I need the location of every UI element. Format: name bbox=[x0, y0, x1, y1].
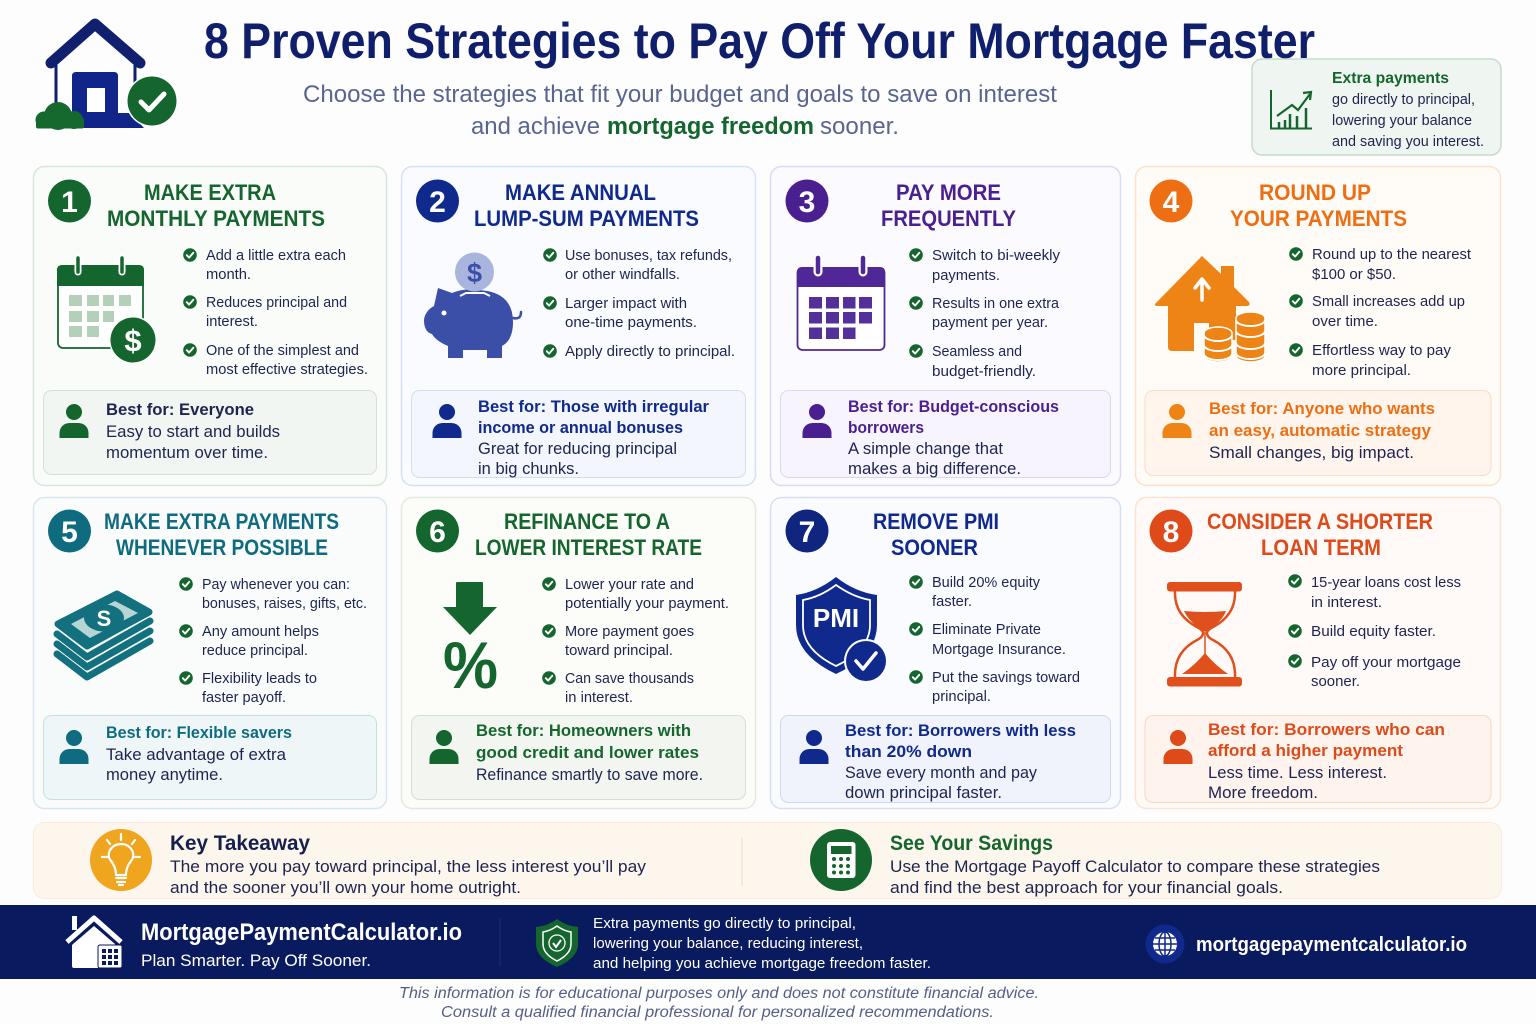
bullet list 6: Lower your rate and bbox=[565, 577, 694, 593]
best for 2: income or annual bonuses bbox=[478, 418, 683, 437]
bullet list 3: payment per year. bbox=[932, 315, 1048, 331]
bullet list 6: More payment goes bbox=[565, 624, 694, 640]
website url: mortgagepaymentcalculator.io bbox=[1196, 934, 1467, 956]
bullet list 3: Seamless and bbox=[932, 344, 1022, 360]
callout: extra payments: lowering your balance bbox=[1332, 113, 1472, 129]
panel: strategy 2 bbox=[402, 166, 756, 486]
heading 8: LOAN TERM bbox=[1261, 535, 1381, 560]
icon: house with coins bbox=[1155, 256, 1265, 362]
best for 7: Save every month and pay bbox=[845, 764, 1038, 782]
heading 6: REFINANCE TO A bbox=[504, 509, 670, 534]
number badge 4 bbox=[1150, 180, 1192, 222]
footer brand: Plan Smarter. Pay Off Sooner. bbox=[141, 951, 371, 970]
best for 5 bbox=[44, 716, 376, 800]
title: 8 Proven Strategies to Pay Off Your Mortgage Faster bbox=[204, 13, 1315, 69]
best for 4: Small changes, big impact. bbox=[1209, 444, 1414, 462]
subtitle: mortgage freedom bbox=[607, 113, 814, 140]
panel: strategy 4 bbox=[1136, 166, 1500, 486]
best for 7: down principal faster. bbox=[845, 784, 1002, 802]
number badge 5: 5 bbox=[61, 516, 78, 549]
number badge 5 bbox=[48, 510, 91, 552]
number badge 3: 3 bbox=[799, 186, 815, 219]
icon: calendar with dollar bbox=[57, 258, 157, 364]
best for 5: Best for: Flexible savers bbox=[106, 723, 292, 742]
bullet list 5 bbox=[179, 577, 367, 706]
icon: down arrow and percent bbox=[443, 582, 498, 702]
best for 6: good credit and lower rates bbox=[476, 743, 699, 762]
icon: stack of cash bbox=[57, 594, 150, 677]
best for 7: than 20% down bbox=[845, 742, 972, 761]
heading 3: FREQUENTLY bbox=[881, 206, 1016, 231]
bullet list 6: in interest. bbox=[565, 690, 633, 706]
takeaway band bbox=[34, 822, 1502, 898]
number badge 8 bbox=[1150, 510, 1192, 552]
heading 8: CONSIDER A SHORTER bbox=[1207, 509, 1433, 534]
bullet list 3: budget-friendly. bbox=[932, 364, 1036, 380]
heading 5: WHENEVER POSSIBLE bbox=[116, 535, 328, 560]
heading 2: LUMP-SUM PAYMENTS bbox=[474, 206, 699, 231]
best for 2: in big chunks. bbox=[478, 460, 579, 478]
bullet list 8: in interest. bbox=[1311, 595, 1382, 611]
disclaimer: Consult a qualified financial professional for personalized recommendations. bbox=[441, 1004, 994, 1021]
footer brand: MortgagePaymentCalculator.io bbox=[141, 919, 462, 946]
bullet list 7: principal. bbox=[932, 689, 991, 705]
bullet list 1: most effective strategies. bbox=[206, 362, 368, 378]
best for 6 bbox=[412, 716, 746, 800]
heading 6 bbox=[475, 509, 702, 560]
best for 3 bbox=[780, 390, 1110, 478]
callout: extra payments: go directly to principal, bbox=[1332, 92, 1475, 108]
number badge 6: 6 bbox=[429, 516, 446, 549]
bullet list 2: Larger impact with bbox=[565, 296, 687, 312]
number badge 8: 8 bbox=[1163, 516, 1179, 549]
bullet list 8 bbox=[1288, 574, 1461, 690]
icon: stack of cash: S bbox=[97, 606, 111, 631]
bullet list 3: payments. bbox=[932, 268, 1000, 284]
bullet list 4: Small increases add up bbox=[1312, 294, 1465, 310]
heading 6: LOWER INTEREST RATE bbox=[475, 535, 702, 560]
bullet list 2: Use bonuses, tax refunds, bbox=[565, 248, 732, 264]
number badge 1: 1 bbox=[61, 186, 78, 219]
footer brand bbox=[141, 919, 462, 970]
best for 1: momentum over time. bbox=[106, 444, 268, 462]
best for 7 bbox=[780, 716, 1110, 802]
best for 3: Best for: Budget-conscious bbox=[848, 397, 1059, 416]
icon: PMI shield with check: PMI bbox=[813, 603, 859, 633]
footer message: lowering your balance, reducing interest, bbox=[593, 935, 863, 952]
bullet list 4: Effortless way to pay bbox=[1312, 343, 1452, 359]
bullet list 1: month. bbox=[206, 267, 251, 283]
bullet list 7 bbox=[909, 575, 1080, 705]
key takeaway text: The more you pay toward principal, the less interest you’ll pay bbox=[170, 857, 646, 876]
icon: calculator bbox=[810, 829, 872, 891]
heading 4 bbox=[1230, 180, 1407, 231]
bullet list 6 bbox=[542, 577, 729, 706]
bullet list 3: Results in one extra bbox=[932, 296, 1060, 312]
bullet list 7: Put the savings toward bbox=[932, 670, 1080, 686]
bullet list 8: 15-year loans cost less bbox=[1311, 575, 1461, 591]
bullet list 8: Pay off your mortgage bbox=[1311, 655, 1461, 671]
subtitle bbox=[303, 81, 1057, 140]
number badge 1 bbox=[48, 180, 91, 222]
heading 2 bbox=[474, 180, 699, 231]
subtitle: and achieve bbox=[471, 113, 600, 140]
bullet list 4: more principal. bbox=[1312, 363, 1411, 379]
best for 3: borrowers bbox=[848, 418, 924, 437]
best for 2 bbox=[412, 390, 746, 478]
bullet list 2: one-time payments. bbox=[565, 315, 697, 331]
number badge 4: 4 bbox=[1163, 186, 1180, 219]
best for 8: Less time. Less interest. bbox=[1208, 764, 1387, 782]
icon: calendar with dollar: $ bbox=[124, 323, 142, 358]
footer message: Extra payments go directly to principal, bbox=[593, 915, 856, 932]
heading 1: MAKE EXTRA bbox=[144, 180, 276, 205]
heading 5 bbox=[104, 509, 339, 560]
best for 8: Best for: Borrowers who can bbox=[1208, 720, 1445, 739]
bullet list 7: Mortgage Insurance. bbox=[932, 642, 1066, 658]
best for 4: Best for: Anyone who wants bbox=[1209, 399, 1435, 418]
bullet list 4 bbox=[1289, 247, 1471, 379]
panel: strategy 8 bbox=[1136, 498, 1500, 808]
panel: strategy 3 bbox=[770, 166, 1120, 486]
icon: hourglass bbox=[1167, 582, 1242, 686]
bullet list 3: Switch to bi-weekly bbox=[932, 248, 1061, 264]
icon: green shield bbox=[536, 919, 578, 967]
panel: strategy 1 bbox=[34, 166, 386, 486]
bullet list 7: Build 20% equity bbox=[932, 575, 1041, 591]
best for 6: Best for: Homeowners with bbox=[476, 721, 691, 740]
heading 1 bbox=[107, 180, 325, 231]
callout: extra payments: and saving you interest. bbox=[1332, 134, 1484, 150]
key takeaway text bbox=[170, 832, 646, 897]
number badge 2: 2 bbox=[429, 186, 446, 219]
bullet list 6: potentially your payment. bbox=[565, 596, 729, 612]
bullet list 2: or other windfalls. bbox=[565, 267, 680, 283]
bullet list 1: One of the simplest and bbox=[206, 343, 359, 359]
callout: extra payments bbox=[1252, 59, 1501, 155]
heading 2: MAKE ANNUAL bbox=[505, 180, 656, 205]
see your savings text bbox=[890, 832, 1380, 897]
icon: PMI shield with check bbox=[796, 577, 888, 683]
panel: strategy 6 bbox=[402, 498, 756, 808]
icon: growth chart bbox=[1271, 90, 1312, 128]
best for 8: afford a higher payment bbox=[1208, 741, 1403, 760]
icon: footer house with calculator bbox=[67, 916, 122, 968]
number badge 3 bbox=[786, 180, 828, 222]
best for 7: Best for: Borrowers with less bbox=[845, 721, 1076, 740]
best for 5: Take advantage of extra bbox=[106, 746, 287, 764]
bullet list 8: Build equity faster. bbox=[1311, 624, 1436, 640]
heading 3: PAY MORE bbox=[896, 180, 1001, 205]
best for 8: More freedom. bbox=[1208, 784, 1318, 802]
bullet list 2: Apply directly to principal. bbox=[565, 344, 735, 360]
number badge 7: 7 bbox=[799, 516, 815, 549]
bullet list 2 bbox=[543, 248, 735, 360]
see your savings text: Use the Mortgage Payoff Calculator to compare these strategies bbox=[890, 857, 1380, 876]
bullet list 4: over time. bbox=[1312, 314, 1378, 330]
bullet list 5: bonuses, raises, gifts, etc. bbox=[202, 596, 367, 612]
footer message bbox=[593, 915, 931, 972]
key takeaway text: Key Takeaway bbox=[170, 832, 310, 855]
bullet list 4: Round up to the nearest bbox=[1312, 247, 1471, 263]
icon: piggy bank bbox=[424, 252, 521, 358]
disclaimer bbox=[399, 985, 1039, 1021]
best for 4: an easy, automatic strategy bbox=[1209, 421, 1432, 440]
bullet list 3 bbox=[909, 248, 1061, 380]
bullet list 7: Eliminate Private bbox=[932, 622, 1041, 638]
best for 3: A simple change that bbox=[848, 440, 1003, 458]
disclaimer: This information is for educational purposes only and does not constitute financial advice. bbox=[399, 985, 1039, 1002]
icon: calendar bbox=[797, 258, 885, 350]
bullet list 1: Reduces principal and bbox=[206, 295, 347, 311]
heading 7 bbox=[873, 509, 999, 560]
heading 1: MONTHLY PAYMENTS bbox=[107, 206, 325, 231]
number badge 6 bbox=[416, 510, 459, 552]
callout: extra payments: Extra payments bbox=[1332, 70, 1449, 87]
bullet list 1 bbox=[183, 248, 368, 378]
heading 8 bbox=[1207, 509, 1433, 560]
bullet list 8: sooner. bbox=[1311, 674, 1360, 690]
see your savings text: See Your Savings bbox=[890, 832, 1053, 855]
best for 6: Refinance smartly to save more. bbox=[476, 766, 703, 784]
heading 7: REMOVE PMI bbox=[873, 509, 999, 534]
bullet list 6: Can save thousands bbox=[565, 671, 694, 687]
heading 4: YOUR PAYMENTS bbox=[1230, 206, 1407, 231]
number badge 7 bbox=[786, 510, 828, 552]
panel: strategy 7 bbox=[770, 498, 1120, 808]
see your savings text: and find the best approach for your financial goals. bbox=[890, 878, 1283, 897]
icon: piggy bank: $ bbox=[467, 258, 482, 288]
bullet list 6: toward principal. bbox=[565, 643, 673, 659]
icon: down arrow and percent: % bbox=[443, 628, 498, 702]
bullet list 4: $100 or $50. bbox=[1312, 267, 1396, 283]
best for 3: makes a big difference. bbox=[848, 460, 1021, 478]
best for 2: Best for: Those with irregular bbox=[478, 397, 709, 416]
best for 1 bbox=[44, 390, 376, 474]
bullet list 5: Any amount helps bbox=[202, 624, 319, 640]
heading 4: ROUND UP bbox=[1259, 180, 1371, 205]
subtitle: sooner. bbox=[820, 113, 899, 140]
heading 7: SOONER bbox=[891, 535, 978, 560]
footer bar bbox=[0, 905, 1536, 979]
logo: house with check badge bbox=[36, 24, 178, 130]
best for 1: Best for: Everyone bbox=[106, 400, 254, 419]
bullet list 5: Flexibility leads to bbox=[202, 671, 317, 687]
bullet list 1: interest. bbox=[206, 314, 258, 330]
bullet list 7: faster. bbox=[932, 594, 972, 610]
best for 2: Great for reducing principal bbox=[478, 440, 677, 458]
subtitle: Choose the strategies that fit your budget and goals to save on interest bbox=[303, 81, 1057, 108]
footer message: and helping you achieve mortgage freedom faster. bbox=[593, 955, 931, 972]
key takeaway text: and the sooner you’ll own your home outright. bbox=[170, 878, 521, 897]
bullet list 5: reduce principal. bbox=[202, 643, 308, 659]
heading 5: MAKE EXTRA PAYMENTS bbox=[104, 509, 339, 534]
best for 1: Easy to start and builds bbox=[106, 423, 280, 441]
panel: strategy 5 bbox=[34, 498, 386, 808]
icon: light bulb bbox=[90, 829, 152, 891]
number badge 2 bbox=[416, 180, 459, 222]
best for 4 bbox=[1145, 390, 1491, 476]
best for 5: money anytime. bbox=[106, 766, 223, 784]
bullet list 5: Pay whenever you can: bbox=[202, 577, 350, 593]
bullet list 5: faster payoff. bbox=[202, 690, 286, 706]
heading 3 bbox=[881, 180, 1016, 231]
icon: globe bbox=[1146, 924, 1184, 964]
best for 8 bbox=[1145, 716, 1491, 802]
bullet list 1: Add a little extra each bbox=[206, 248, 346, 264]
